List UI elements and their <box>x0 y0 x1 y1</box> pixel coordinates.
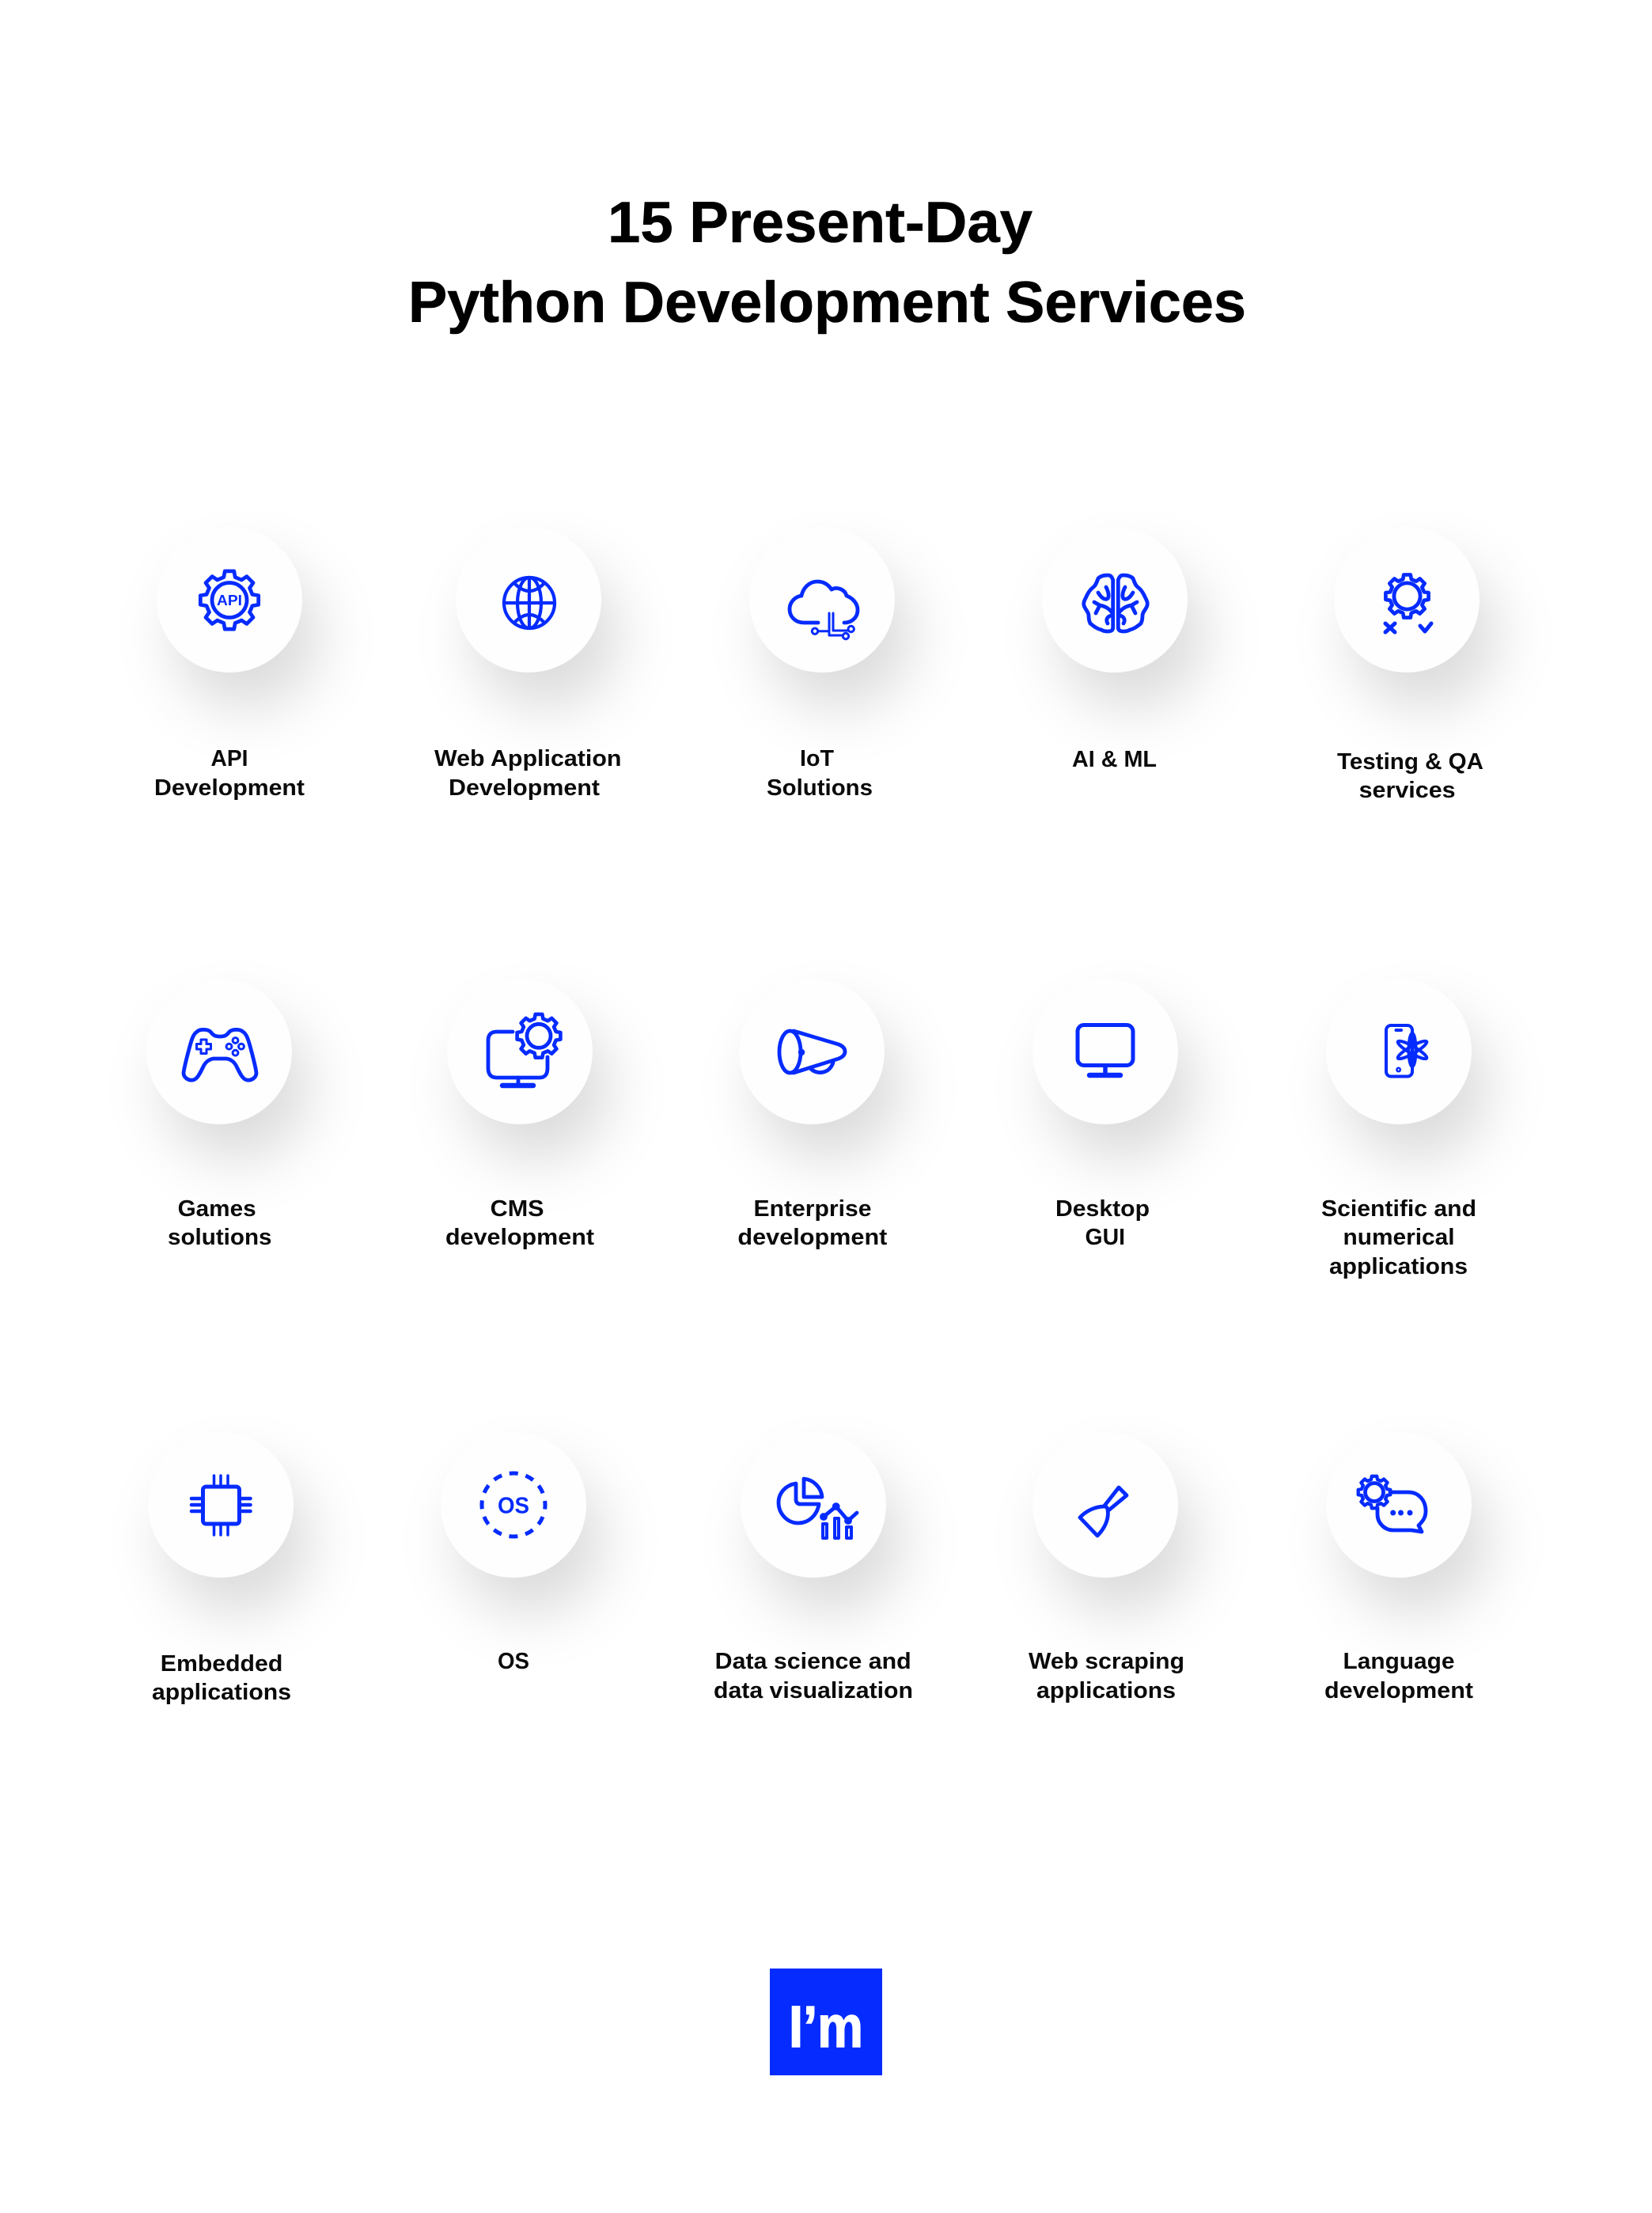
label: services <box>1359 778 1456 803</box>
label: development <box>737 1225 888 1250</box>
logo <box>770 1969 882 2075</box>
icon: chip <box>191 1476 250 1535</box>
label: Games <box>178 1196 256 1222</box>
label: Development <box>449 775 600 801</box>
icon: globe <box>504 578 555 628</box>
service: CMS development <box>445 979 610 1250</box>
label: Solutions <box>767 775 873 801</box>
label: Data science and <box>715 1649 911 1674</box>
icon: gear and speech bubble <box>1358 1476 1426 1532</box>
service: Embedded applications <box>148 1432 311 1705</box>
label: Web Application <box>434 746 622 771</box>
label <box>1337 749 1483 803</box>
label: applications <box>1329 1254 1468 1279</box>
service: Games solutions <box>146 979 309 1250</box>
label <box>445 1196 594 1250</box>
label: development <box>1324 1678 1473 1703</box>
label: data visualization <box>714 1678 913 1703</box>
label: applications <box>152 1680 291 1705</box>
service: Data science and data visualization <box>714 1432 913 1703</box>
service: Web scraping applications <box>1029 1432 1195 1703</box>
label <box>1321 1196 1476 1279</box>
label: Testing & QA <box>1337 749 1483 775</box>
title <box>408 191 1246 335</box>
label: API <box>210 746 248 771</box>
icon: brain <box>1084 575 1147 631</box>
label <box>434 746 622 801</box>
label <box>152 1651 291 1705</box>
label <box>1324 1649 1473 1703</box>
label: numerical <box>1343 1225 1454 1250</box>
service: API Development <box>154 527 320 801</box>
label: Web scraping <box>1029 1649 1184 1674</box>
label: applications <box>1036 1678 1176 1703</box>
service: IoT Solutions <box>749 527 912 801</box>
icon: desktop monitor <box>1078 1025 1133 1075</box>
label <box>1029 1649 1184 1703</box>
label: GUI <box>1086 1225 1125 1250</box>
label <box>714 1649 913 1703</box>
label <box>767 746 873 801</box>
label: development <box>445 1225 594 1250</box>
service: Web Application Development <box>434 527 622 801</box>
icon: dashed circle OS <box>482 1473 545 1537</box>
service: Desktop GUI <box>1032 979 1195 1250</box>
label: Enterprise <box>753 1196 872 1222</box>
icon: gear with cross and check <box>1385 574 1431 632</box>
service: Enterprise development <box>737 979 902 1250</box>
icon: dashed circle OS: OS <box>498 1494 529 1519</box>
icon: API gear <box>200 571 259 629</box>
icon: game controller <box>184 1029 256 1080</box>
label: IoT <box>800 746 834 771</box>
label: Scientific and <box>1321 1196 1476 1222</box>
label: CMS <box>491 1196 544 1222</box>
title: Python Development Services <box>408 271 1246 335</box>
service: Scientific and numerical applications <box>1321 979 1489 1279</box>
icon: phone with atom <box>1386 1025 1428 1076</box>
icon: scraper brush <box>1080 1487 1127 1536</box>
label: solutions <box>168 1225 272 1250</box>
label <box>168 1196 272 1250</box>
logo: I’m <box>789 1994 863 2060</box>
service: Language development <box>1324 1432 1489 1703</box>
label: Language <box>1343 1649 1454 1674</box>
label <box>1055 1196 1150 1250</box>
label: Desktop <box>1055 1196 1150 1222</box>
label <box>154 746 305 801</box>
icon: API gear: API <box>217 593 242 608</box>
service: AI & ML <box>1042 527 1205 772</box>
icon: IoT cloud <box>790 582 858 639</box>
label: Embedded <box>161 1651 282 1677</box>
icon: megaphone <box>779 1031 845 1073</box>
service: Testing & QA services <box>1334 527 1497 803</box>
label <box>737 1196 888 1250</box>
icon: pie chart and bars <box>779 1479 857 1538</box>
label: OS <box>498 1649 529 1674</box>
label: Development <box>154 775 305 801</box>
service: OS <box>441 1432 604 1674</box>
icon: monitor with gear <box>488 1014 560 1086</box>
title: 15 Present-Day <box>608 191 1032 255</box>
label: AI & ML <box>1072 747 1157 772</box>
